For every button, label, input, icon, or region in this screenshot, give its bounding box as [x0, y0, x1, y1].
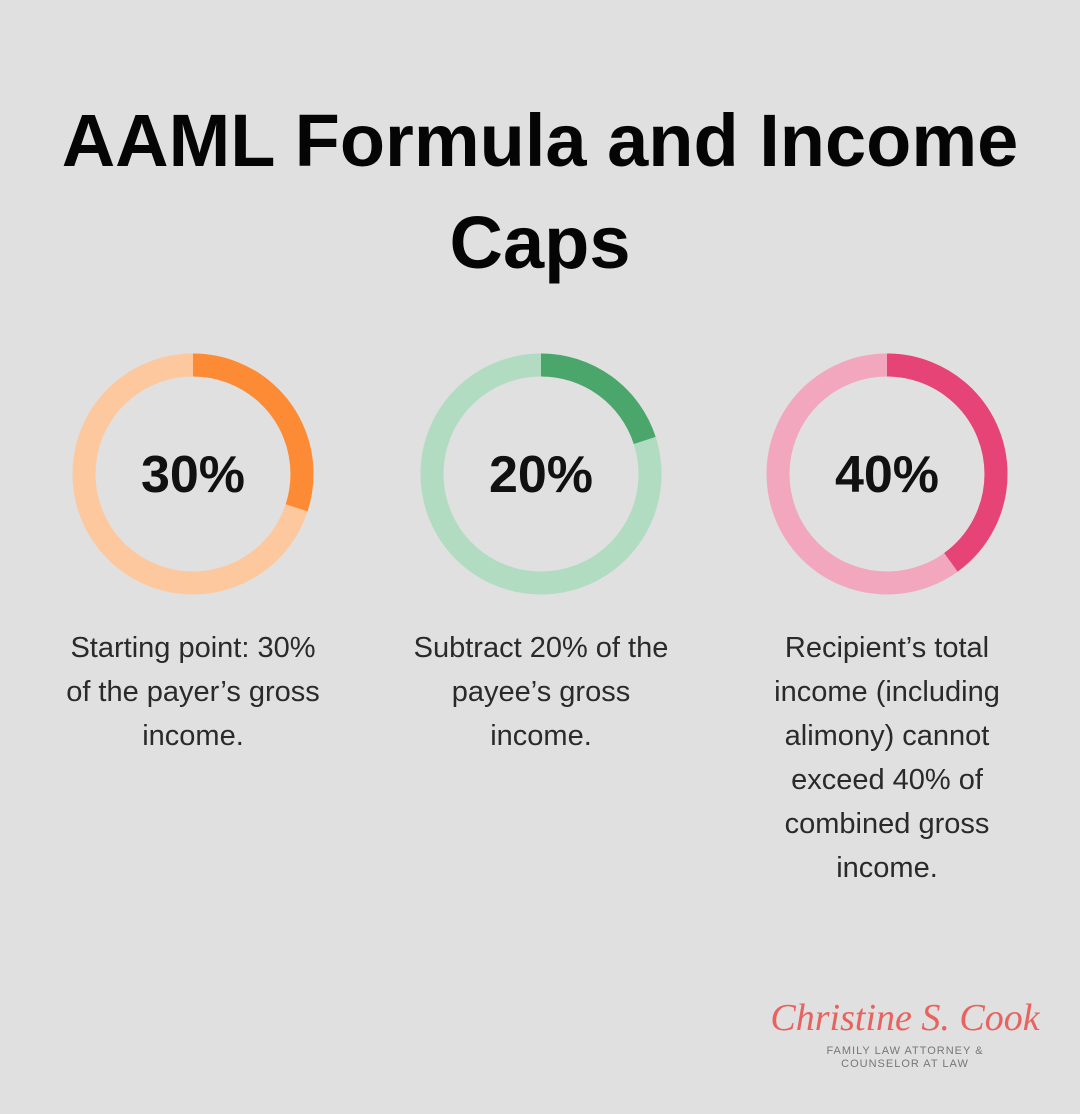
panel: cap — [766, 354, 1008, 884]
caption — [414, 632, 668, 752]
caption — [66, 632, 320, 752]
caption: exceed 40% of — [791, 764, 983, 796]
logo — [770, 997, 1040, 1070]
logo: Christine S. Cook — [770, 997, 1040, 1039]
caption: alimony) cannot — [785, 720, 989, 752]
logo: FAMILY LAW ATTORNEY & — [826, 1045, 984, 1057]
donut chart 20%: 20% — [489, 446, 593, 504]
donut chart 30% — [72, 354, 314, 594]
title: Caps — [450, 201, 630, 284]
caption: Starting point: 30% — [70, 632, 316, 664]
title: AAML Formula and Income — [62, 99, 1018, 182]
logo: COUNSELOR AT LAW — [841, 1058, 969, 1070]
panel: starting point — [66, 354, 320, 752]
donut chart 30%: 30% — [141, 446, 245, 504]
title — [62, 99, 1018, 284]
caption: Subtract 20% of the — [414, 632, 668, 664]
caption: income. — [836, 852, 938, 884]
caption: income. — [490, 720, 592, 752]
caption: combined gross — [785, 808, 989, 840]
caption: income. — [142, 720, 244, 752]
donut chart 40% — [766, 354, 1008, 594]
donut chart 40%: 40% — [835, 446, 939, 504]
caption: of the payer’s gross — [66, 676, 320, 708]
panel: subtract — [414, 354, 668, 752]
donut chart 20% — [420, 354, 662, 594]
caption: Recipient’s total — [785, 632, 989, 664]
caption: income (including — [774, 676, 1000, 708]
caption — [774, 632, 1000, 884]
caption: payee’s gross — [452, 676, 630, 708]
